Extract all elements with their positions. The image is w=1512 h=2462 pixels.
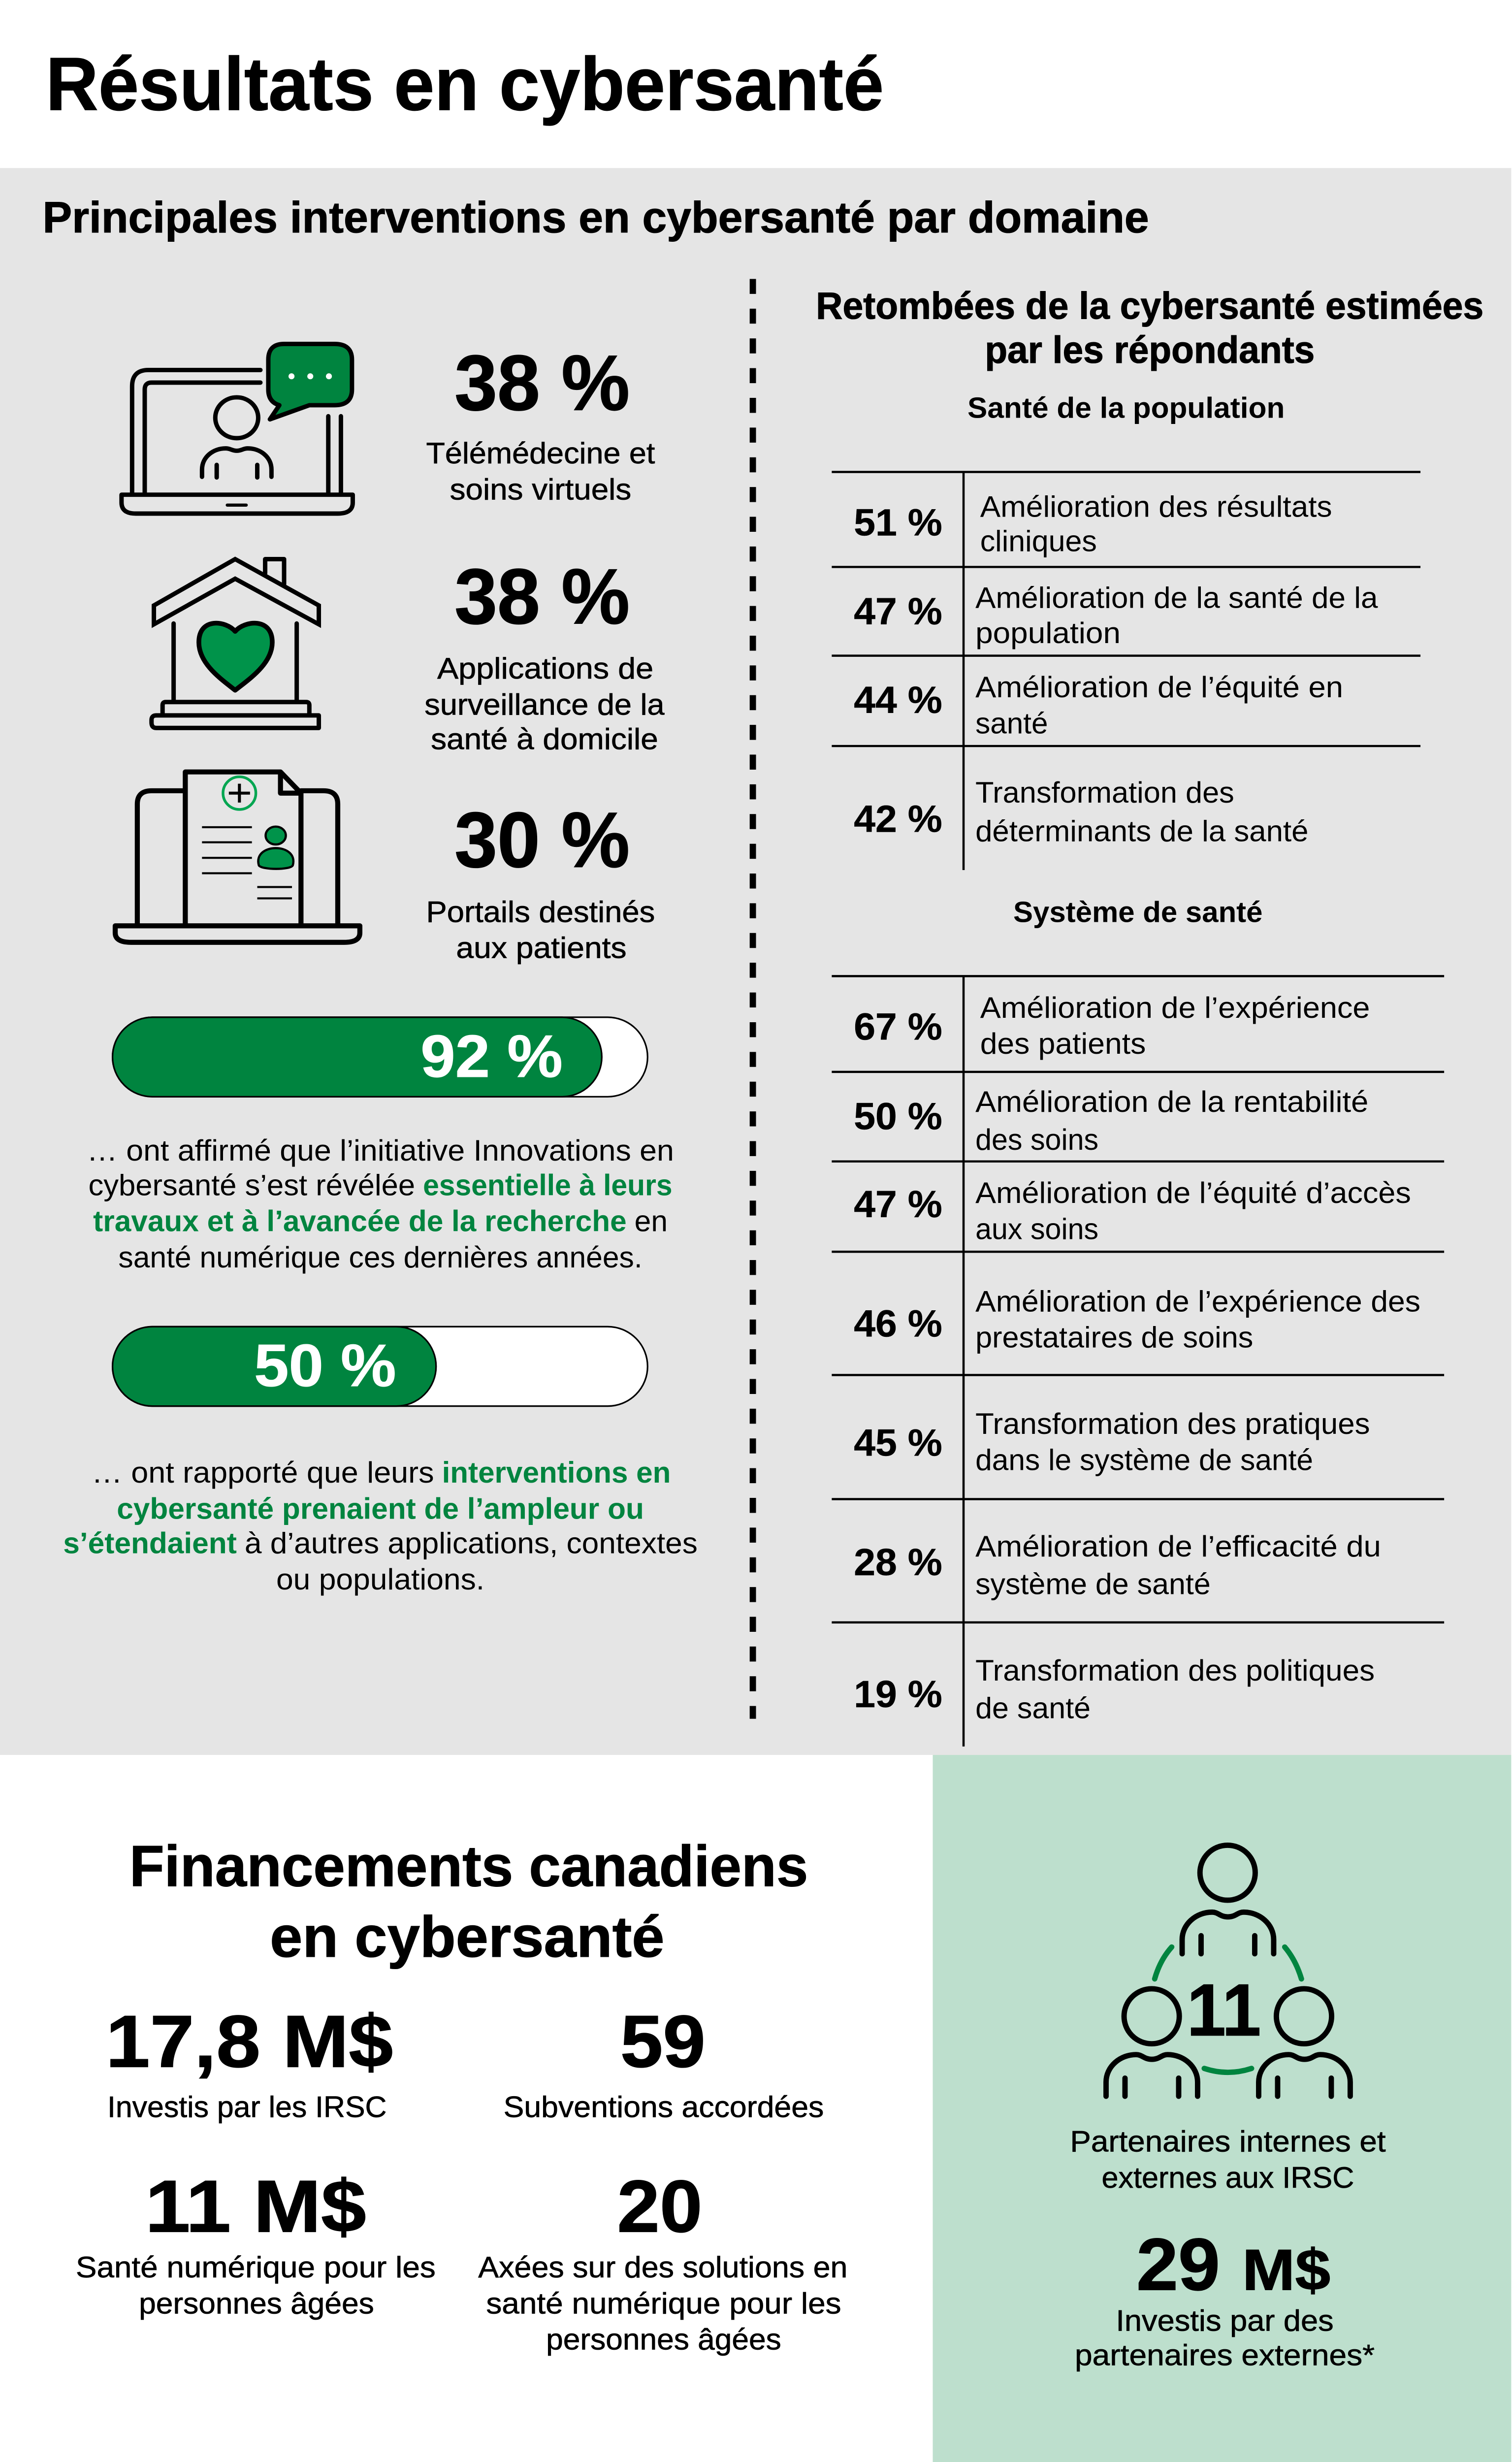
table: health system: 67 % xyxy=(854,1006,942,1048)
progress bar: 92 % xyxy=(113,1017,647,1097)
table: health system: 50 % xyxy=(854,1096,942,1137)
table: population health: 51 % xyxy=(854,502,942,544)
stat: telemedicine xyxy=(426,339,655,506)
text: internal and external partners: externes aux IRSC xyxy=(1102,2161,1354,2194)
panel: Canadian funding xyxy=(76,1834,847,2356)
stat: external partner investment: 29 xyxy=(1136,2223,1220,2305)
text block: essential initiative: … ont affirmé que l’initiative Innovations en xyxy=(87,1134,674,1167)
table: health system: Transformation des pratiques xyxy=(975,1407,1370,1440)
stat: grants awarded xyxy=(504,2000,824,2124)
text block: interventions scaling xyxy=(63,1456,698,1596)
text block: interventions scaling: ou populations. xyxy=(276,1562,484,1596)
stat: patient portals: 30 % xyxy=(454,796,630,884)
table: health system: prestataires de soins xyxy=(975,1321,1253,1354)
heading: Canadian funding: Financements canadiens xyxy=(129,1834,808,1899)
text: internal and external partners: Partenaires internes et xyxy=(1070,2125,1386,2158)
table: health system: aux soins xyxy=(975,1212,1098,1246)
progress bar: 50 % xyxy=(113,1327,647,1406)
stat: home monitoring xyxy=(424,552,665,755)
table: health system: de santé xyxy=(975,1691,1091,1724)
stat: grants awarded: Subventions accordées xyxy=(504,2090,824,2124)
stat: digital health for older adults xyxy=(76,2165,436,2320)
table: health system xyxy=(832,976,1444,1747)
table: health system: 19 % xyxy=(854,1674,942,1716)
table: population health: cliniques xyxy=(980,524,1097,558)
table: health system: système de santé xyxy=(975,1567,1211,1600)
heading: estimated impacts: par les répondants xyxy=(985,329,1315,371)
table: population health: 42 % xyxy=(854,799,942,840)
stat: grants on older adult solutions xyxy=(478,2165,847,2356)
table: health system: des soins xyxy=(975,1123,1098,1156)
table: health system: 28 % xyxy=(854,1542,942,1584)
stat: home monitoring: Applications de xyxy=(437,651,653,685)
stat: external partner investment: partenaires externes* xyxy=(1075,2338,1375,2371)
table: population health: Amélioration de la santé de la xyxy=(975,581,1378,614)
text block: essential initiative xyxy=(87,1134,674,1274)
progress bar: 92 %: 92 % xyxy=(420,1023,563,1090)
table: population health: Amélioration des résultats xyxy=(980,490,1332,523)
stat: patient portals xyxy=(426,796,655,965)
stat: home monitoring: 38 % xyxy=(454,552,630,640)
stat: home monitoring: santé à domicile xyxy=(431,722,658,755)
stat: invested by CIHR: 17,8 M$ xyxy=(106,2000,393,2082)
table: population health: santé xyxy=(975,707,1048,740)
table: health system: Amélioration de la rentabilité xyxy=(975,1085,1368,1118)
table: population health: Amélioration de l’équité en xyxy=(975,670,1343,704)
table: health system: Amélioration de l’efficacité du xyxy=(975,1529,1381,1563)
table: population health: 47 % xyxy=(854,591,942,633)
stat: grants on older adult solutions: santé numérique pour les xyxy=(486,2286,841,2320)
table: health system: dans le système de santé xyxy=(975,1443,1313,1476)
stat: digital health for older adults: 11 M$ xyxy=(145,2165,366,2247)
panel: interventions xyxy=(0,168,1511,1755)
subheading: health system: Système de santé xyxy=(1013,895,1263,928)
table: health system: 45 % xyxy=(854,1423,942,1464)
text block: interventions scaling: à d’autres applications, contextes xyxy=(245,1526,698,1559)
text block: interventions scaling: cybersanté prenaient de l’ampleur ou xyxy=(117,1491,644,1525)
stat: digital health for older adults: Santé numérique pour les xyxy=(76,2250,436,2284)
icon: telemedicine laptop xyxy=(122,344,353,514)
stat: grants on older adult solutions: personnes âgées xyxy=(546,2323,781,2356)
stat: telemedicine: Télémédecine et xyxy=(426,436,655,470)
icon: home with heart xyxy=(152,559,319,728)
panel: partners xyxy=(933,1755,1511,2462)
icon: patient portal xyxy=(115,772,360,942)
stat: grants on older adult solutions: Axées sur des solutions en xyxy=(478,2250,847,2284)
stat: patient portals: aux patients xyxy=(456,931,627,965)
text block: interventions scaling: s’étendaient xyxy=(63,1526,237,1559)
icon: partner network xyxy=(1106,1845,1350,2096)
table: health system: Amélioration de l’expérience xyxy=(980,991,1370,1024)
table: health system: Transformation des politiques xyxy=(975,1653,1375,1687)
heading: estimated impacts: Retombées de la cybersanté estimées xyxy=(816,286,1483,327)
text block: essential initiative: travaux et à l’avancée de la recherche xyxy=(93,1204,627,1238)
text block: essential initiative: cybersanté s’est révélée xyxy=(89,1168,415,1201)
title: Résultats en cybersanté xyxy=(46,42,884,126)
table: population health: Transformation des xyxy=(975,776,1234,809)
subheading: population health: Santé de la population xyxy=(967,391,1285,424)
table: population health: déterminants de la santé xyxy=(975,814,1308,847)
stat: external partner investment: M$ xyxy=(1242,2238,1330,2302)
heading: Canadian funding: en cybersanté xyxy=(270,1905,665,1970)
stat: invested by CIHR xyxy=(106,2000,393,2124)
table: health system: Amélioration de l’expérience des xyxy=(975,1284,1420,1318)
heading: Canadian funding xyxy=(129,1834,808,1970)
table: health system: Amélioration de l’équité d’accès xyxy=(975,1176,1411,1209)
text block: interventions scaling: … ont rapporté que leurs xyxy=(92,1456,434,1489)
text: internal and external partners xyxy=(1070,2125,1386,2194)
table: health system: 47 % xyxy=(854,1184,942,1226)
stat: telemedicine: soins virtuels xyxy=(450,472,631,506)
stat: external partner investment xyxy=(1075,2223,1375,2371)
table: population health: population xyxy=(975,616,1121,649)
text block: essential initiative: essentielle à leurs xyxy=(423,1168,673,1201)
stat: patient portals: Portails destinés xyxy=(426,895,655,928)
stat: home monitoring: surveillance de la xyxy=(424,687,665,721)
table: health system: 46 % xyxy=(854,1303,942,1345)
table: population health xyxy=(832,472,1420,870)
stat: telemedicine: 38 % xyxy=(454,339,630,426)
table: health system: des patients xyxy=(980,1027,1146,1060)
heading: estimated impacts xyxy=(816,286,1483,371)
icon: partner network: 11 xyxy=(1187,1969,1261,2051)
text block: interventions scaling: interventions en xyxy=(442,1456,671,1489)
text block: essential initiative: santé numérique ces dernières années. xyxy=(118,1240,643,1274)
heading: principal interventions: Principales interventions en cybersanté par domaine xyxy=(43,193,1149,242)
stat: digital health for older adults: personnes âgées xyxy=(139,2286,374,2320)
stat: invested by CIHR: Investis par les IRSC xyxy=(107,2090,386,2124)
stat: grants awarded: 59 xyxy=(620,2000,706,2082)
stat: grants on older adult solutions: 20 xyxy=(617,2165,703,2247)
table: population health: 44 % xyxy=(854,680,942,721)
stat: external partner investment: Investis par des xyxy=(1116,2303,1334,2337)
progress bar: 50 %: 50 % xyxy=(254,1332,396,1399)
text block: essential initiative: en xyxy=(635,1204,668,1238)
